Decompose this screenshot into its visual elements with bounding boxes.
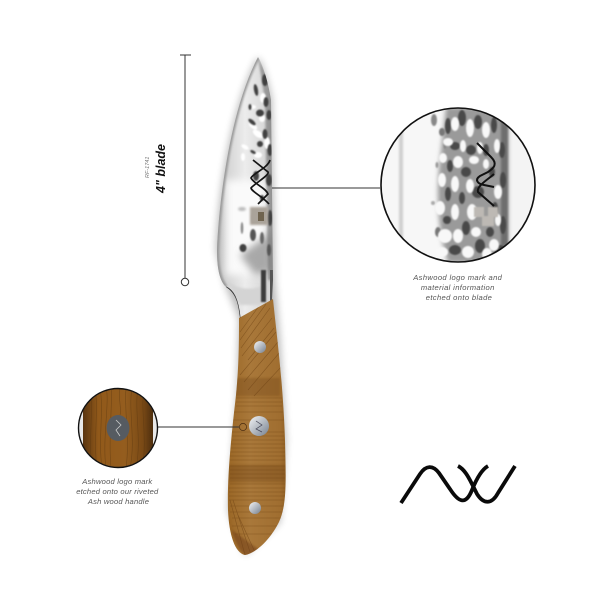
brand logo bbox=[401, 466, 515, 503]
rivet top bbox=[254, 341, 266, 353]
blade bbox=[217, 57, 273, 318]
blade length label: 4" blade bbox=[154, 144, 168, 194]
caption: handle: Ash wood handle bbox=[87, 497, 149, 506]
caption: handle: etched onto our riveted bbox=[76, 487, 159, 496]
caption: blade: material information bbox=[421, 283, 495, 292]
callout line: handle bbox=[158, 423, 247, 431]
speckled material etching bbox=[474, 207, 498, 226]
caption: handle: Ashwood logo mark bbox=[81, 477, 153, 486]
rivet centre with logo bbox=[249, 416, 269, 436]
knife shadow bbox=[216, 57, 286, 555]
caption: blade: Ashwood logo mark and bbox=[412, 273, 503, 282]
etched material information bbox=[250, 207, 268, 225]
model number: RF-1741 bbox=[145, 157, 151, 178]
caption: blade: etched onto blade bbox=[426, 293, 492, 302]
zoom circle: handle bbox=[78, 388, 158, 468]
dimension line: blade length bbox=[180, 55, 191, 286]
etched logo on blade bbox=[251, 160, 270, 204]
callout line: blade bbox=[272, 187, 380, 189]
rivet bottom bbox=[249, 502, 261, 514]
knife bbox=[210, 50, 295, 560]
zoom circle: blade bbox=[380, 106, 536, 263]
rivet in zoom bbox=[106, 415, 130, 441]
handle bbox=[228, 299, 286, 555]
